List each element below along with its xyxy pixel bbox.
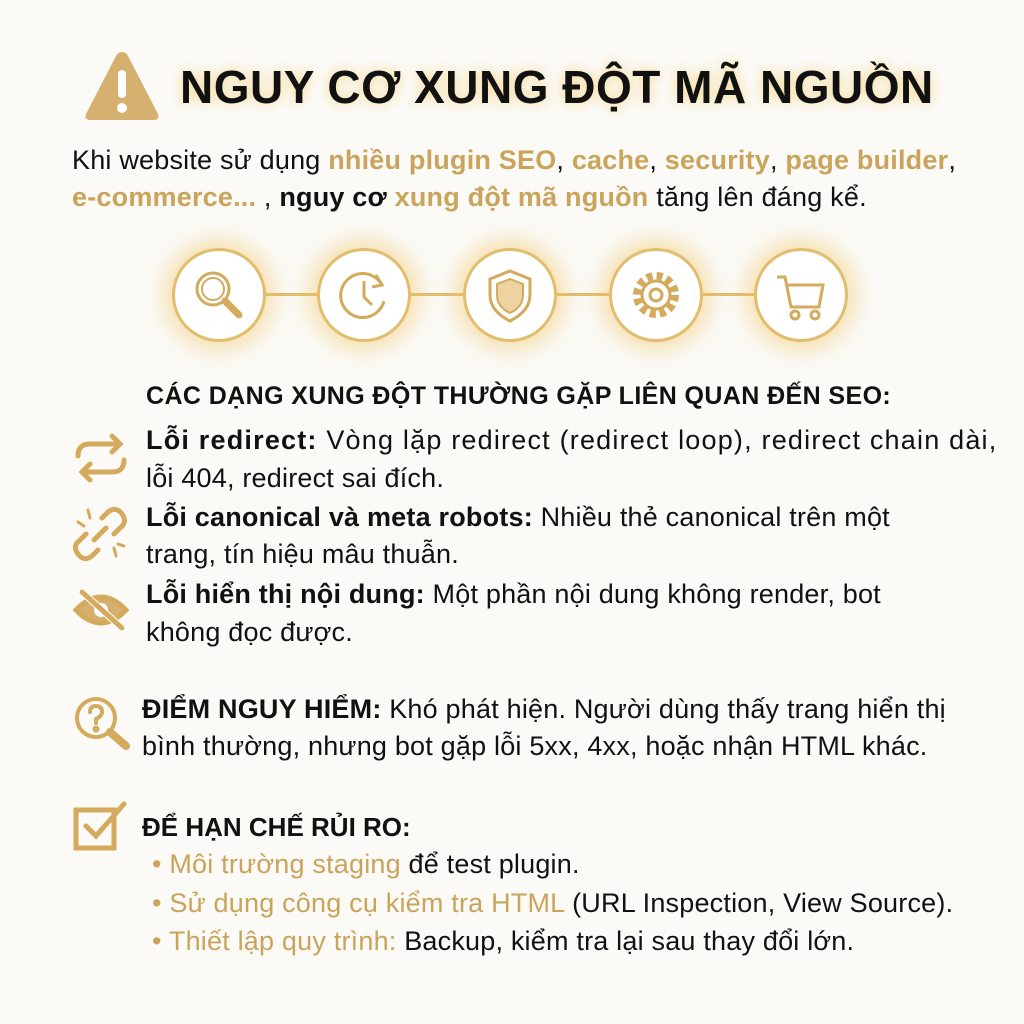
- item: canonical errors: trang, tín hiệu mâu thuẫn.: [146, 539, 459, 569]
- section heading: conflict types: CÁC DẠNG XUNG ĐỘT THƯỜNG GẶP LIÊN QUAN ĐẾN SEO:: [146, 382, 891, 410]
- icon: redirect arrows: [76, 434, 126, 482]
- risk mitigation heading: ĐỂ HẠN CHẾ RỦI RO:: [142, 812, 411, 842]
- icon: gear: [609, 248, 703, 342]
- item: display errors: Lỗi hiển thị nội dung: Một phần nội dung không render, bot: [146, 579, 881, 609]
- item: redirect errors: Lỗi redirect: Vòng lặp redirect (redirect loop), redirect chain dài,: [146, 425, 997, 455]
- intro text: Khi website sử dụng nhiều plugin SEO, cache, security, page builder,: [72, 145, 956, 175]
- bullet list: [152, 849, 953, 956]
- icon: checkbox: [74, 802, 126, 850]
- intro text: [72, 145, 956, 212]
- icon: question magnifier: [75, 697, 130, 750]
- bullet list: • Thiết lập quy trình: Backup, kiểm tra lại sau thay đổi lớn.: [152, 926, 854, 956]
- bullet list: • Sử dụng công cụ kiểm tra HTML (URL Inspection, View Source).: [152, 888, 953, 918]
- icon: cart: [754, 248, 848, 342]
- item: redirect errors: [146, 425, 997, 493]
- danger point text: [142, 694, 946, 761]
- icon: clock: [317, 248, 411, 342]
- icon: warning triangle: [86, 52, 158, 120]
- item: canonical errors: Lỗi canonical và meta robots: Nhiều thẻ canonical trên một: [146, 502, 890, 532]
- icon: search: [172, 248, 266, 342]
- danger point text: bình thường, nhưng bot gặp lỗi 5xx, 4xx, hoặc nhận HTML khác.: [142, 731, 928, 761]
- icon: hidden eye: [72, 590, 130, 630]
- icon row: [152, 228, 868, 362]
- icon: shield: [463, 248, 557, 342]
- item: display errors: không đọc được.: [146, 617, 353, 647]
- intro text: e-commerce... , nguy cơ xung đột mã nguồn tăng lên đáng kể.: [72, 182, 867, 212]
- item: canonical errors: [146, 502, 890, 569]
- danger point text: ĐIỂM NGUY HIỂM: Khó phát hiện. Người dùng thấy trang hiển thị: [142, 694, 946, 724]
- icon: broken link: [72, 506, 128, 562]
- item: display errors: [146, 579, 881, 647]
- bullet list: • Môi trường staging để test plugin.: [152, 849, 580, 879]
- item: redirect errors: lỗi 404, redirect sai đích.: [146, 463, 444, 493]
- title: NGUY CƠ XUNG ĐỘT MÃ NGUỒN: [180, 61, 934, 113]
